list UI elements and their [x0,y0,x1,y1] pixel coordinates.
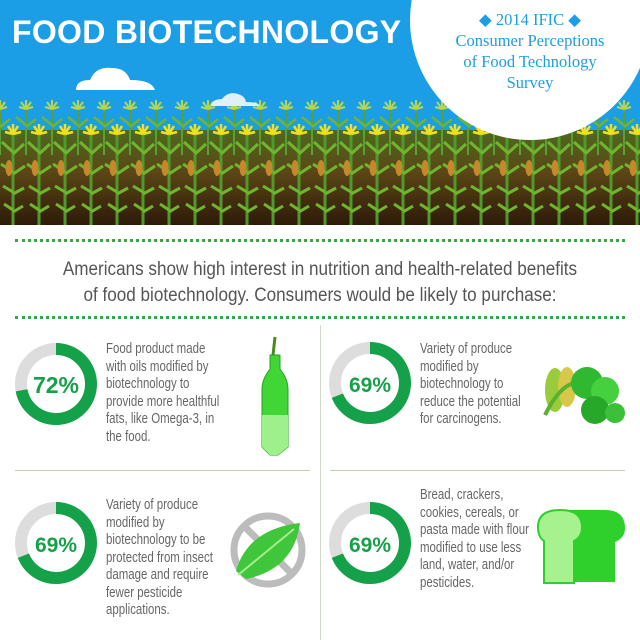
intro heading [63,259,577,306]
panel: carcinogens 69% [329,341,625,427]
header banner [0,0,640,225]
survey badge circle: Consumer Perceptions [456,31,604,50]
donut 69% [329,342,411,424]
survey badge circle: Survey [507,73,553,92]
survey badge circle: of Food Technology [463,52,597,71]
description: Bread, crackers, cookies, cereals, or pasta made with flour modified to use less land, water, and/or pesticides. [420,487,529,590]
donut 69% [15,502,97,584]
donut 72%: 72% [33,372,79,398]
dotted divider bottom [15,316,625,319]
icon: leaf no-bug [230,512,306,588]
intro heading: of food biotechnology. Consumers would be likely to purchase: [83,285,557,306]
panel: insect 69% [15,497,306,618]
donut 69%: 69% [349,534,391,557]
donut 72% [15,343,97,425]
survey badge circle [410,0,640,140]
icon: oil bottle [262,336,288,456]
donut 69%: 69% [349,374,391,397]
intro heading: Americans show high interest in nutrition and health-related benefits [63,259,577,280]
icon: produce [543,367,625,424]
donut 69% [329,502,411,584]
description: Variety of produce modified by biotechnology to be protected from insect damage and require fewer pesticide applications. [106,497,213,618]
donut 69%: 69% [35,534,77,557]
dotted divider top [15,239,625,242]
description: Food product made with oils modified by biotechnology to provide more healthful fats, like Omega-3, in the food. [106,341,219,444]
panel: oils 72% [15,336,288,456]
survey badge circle: ◆ 2014 IFIC ◆ [479,10,581,29]
title: FOOD BIOTECHNOLOGY [12,14,401,50]
description: Variety of produce modified by biotechnology to reduce the potential for carcinogens. [420,341,521,427]
panel: flour 69% [329,487,625,590]
icon: bread [537,509,625,584]
